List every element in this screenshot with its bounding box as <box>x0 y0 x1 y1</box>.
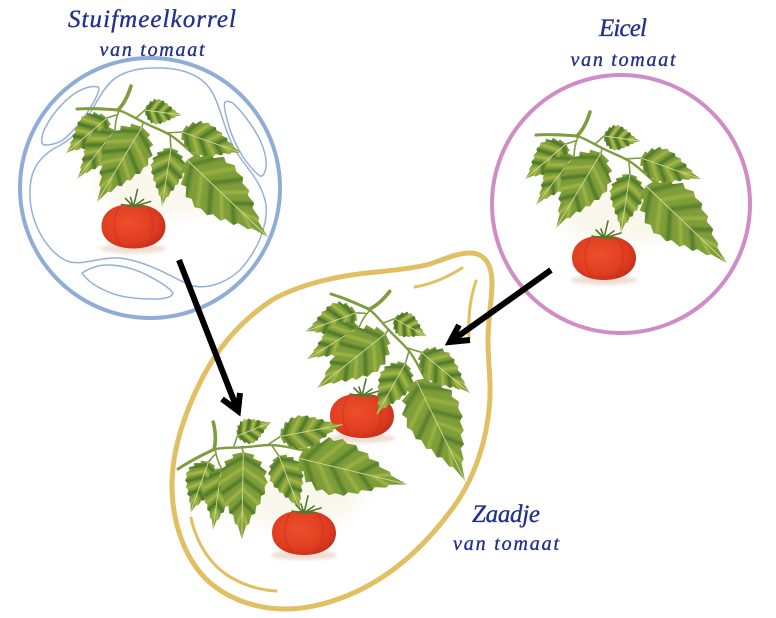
seed outer outline <box>172 253 492 609</box>
heading: Eicel: Eicel <box>598 15 647 42</box>
subheading: van tomaat: van tomaat <box>570 49 676 71</box>
pollen grain inner outlines <box>30 68 266 299</box>
seed tomato plant lower left <box>147 344 435 609</box>
egg cell circle <box>492 75 750 333</box>
egg cell tomato plant <box>514 112 747 285</box>
panel: seed <box>147 253 537 609</box>
panel: egg cell <box>492 75 750 333</box>
subheading: van tomaat: van tomaat <box>100 39 205 61</box>
heading: Zaadje: Zaadje <box>472 501 540 528</box>
arrow: egg cell to seed <box>450 270 551 342</box>
seed tomato plant upper right <box>258 265 537 508</box>
seed inner arcs <box>191 268 476 591</box>
heading: Stuifmeelkorrel: Stuifmeelkorrel <box>68 6 236 33</box>
subheading: van tomaat: van tomaat <box>453 533 559 555</box>
pollen grain outer circle <box>20 58 280 318</box>
pollen grain tomato plant <box>55 86 288 258</box>
arrow: pollen grain to seed <box>179 260 240 411</box>
panel: pollen grain <box>20 58 288 318</box>
